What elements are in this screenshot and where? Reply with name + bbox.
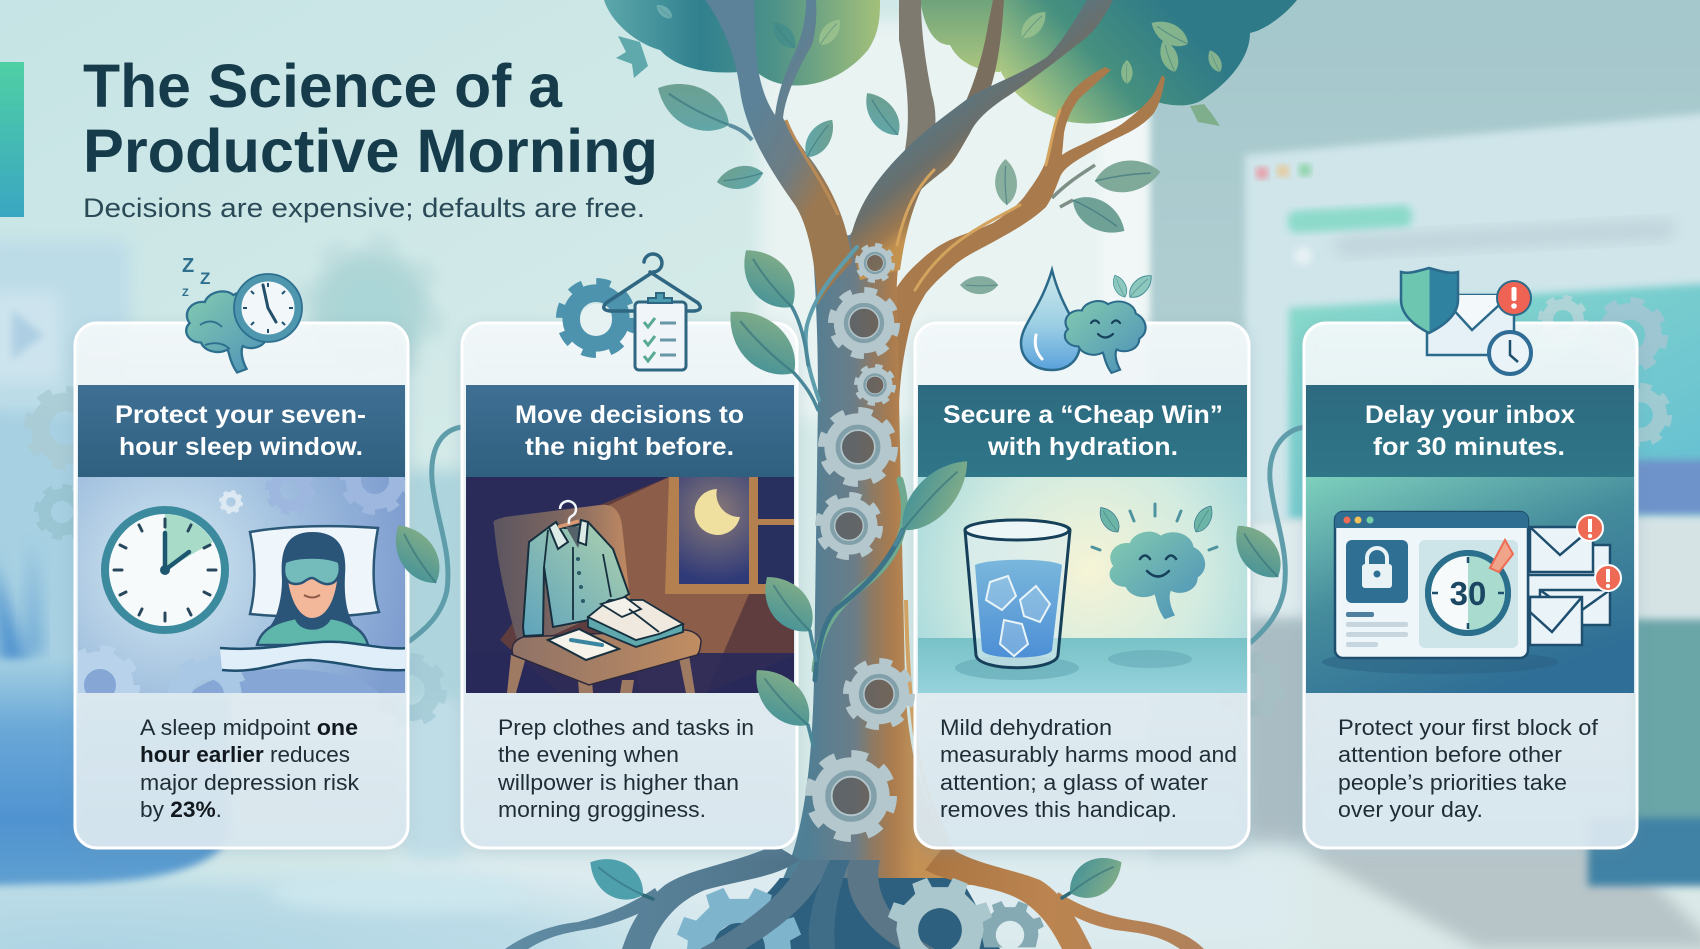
card body text: morning grogginess. [498,797,706,822]
card body text: hour earlier reduces [140,742,350,767]
card header: Secure a “Cheap Win” [943,401,1223,429]
card header: the night before. [525,433,734,461]
card header [918,385,1247,477]
card body text: attention; a glass of water [940,770,1208,795]
card body text: people’s priorities take [1338,770,1567,795]
illustration: locked browser, timer and envelopes: 30 [1450,575,1486,612]
card body text [1338,715,1599,822]
panel: hydration card [915,323,1249,852]
card body text: Protect your first block of [1338,715,1599,740]
card body text: removes this handicap. [940,797,1177,822]
trunk gears [811,245,911,836]
illustration: glass of water and happy brain [918,477,1247,693]
icon: sleeping brain and clock [182,255,302,372]
icon: sleeping brain and clock: Z [200,269,210,288]
card body text: over your day. [1338,797,1483,822]
card body text: willpower is higher than [497,770,739,795]
card header [466,385,794,477]
illustration: clothes on chair at night [466,477,794,693]
card body text: measurably harms mood and [940,742,1237,767]
card header: hour sleep window. [119,433,363,461]
title: Productive Morning [83,117,658,185]
tree: roots [505,845,1204,949]
card header [1306,385,1634,477]
subtitle: Decisions are expensive; defaults are free. [83,193,645,223]
card header: with hydration. [987,433,1178,461]
icon: water drop and smiling brain [1021,270,1156,373]
illustration: clock and sleeper [78,477,405,693]
icon: gear, hanger and checklist [561,254,700,370]
card body text: A sleep midpoint one [140,715,358,740]
card body text: Mild dehydration [940,715,1112,740]
icon: sleeping brain and clock: Z [182,287,189,299]
vine: right connector [1250,427,1305,643]
vine: left connector [408,427,462,642]
icon: sleeping brain and clock: Z [182,255,194,277]
background gears [29,298,1668,723]
card header: Delay your inbox [1365,401,1575,429]
card header [78,385,405,477]
card body text: major depression risk [140,770,360,795]
tree: trunk and branches [705,0,1165,885]
leaves [383,71,1292,910]
illustration: locked browser, timer and envelopes [1306,477,1634,693]
card body text: by 23%. [140,797,222,822]
panel: inbox card [1304,323,1637,852]
accent bar [0,62,24,217]
card body text [497,715,754,822]
card header: Protect your seven- [115,401,366,429]
vines on trunk [643,247,1070,899]
card body text [940,715,1237,822]
card header: Move decisions to [515,401,744,429]
panel: decisions card [462,323,797,852]
card body text: the evening when [498,742,679,767]
title [83,52,658,185]
title: The Science of a [83,52,563,120]
card body text [140,715,360,822]
panel: sleep card [65,323,410,852]
icon: shield, envelope, alert and clock [1401,268,1531,374]
tree: canopy [604,0,1297,126]
card header: for 30 minutes. [1373,433,1565,461]
card body text: Prep clothes and tasks in [498,715,754,740]
card body text: attention before other [1338,742,1562,767]
